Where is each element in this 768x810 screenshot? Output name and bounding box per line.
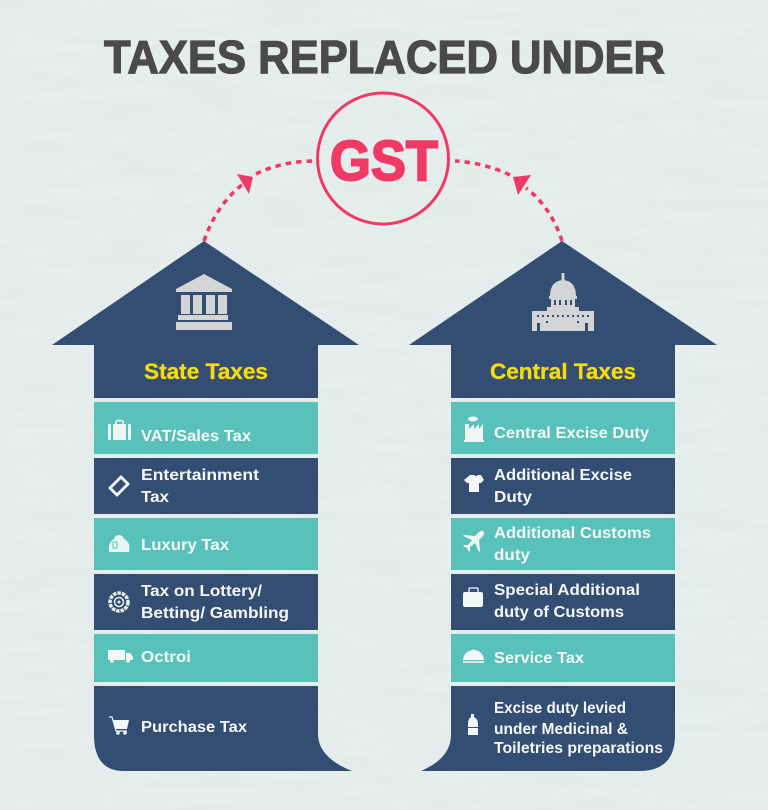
row: Luxury Tax — [94, 518, 318, 570]
row: Luxury Tax: Luxury Tax — [141, 537, 229, 554]
panel: state taxes — [52, 241, 359, 771]
GST circle badge — [318, 93, 448, 224]
state arrow head — [52, 241, 359, 398]
GST circle badge: GST — [330, 129, 438, 193]
row: Purchase Tax — [94, 686, 352, 771]
row: Additional Excise Duty: Additional Excise — [494, 467, 632, 484]
central arrow head — [409, 241, 717, 398]
row: Additional Customs duty: Additional Customs — [494, 525, 651, 542]
row: Excise duty levied under Medicinal & Toiletries preparations: under Medicinal & — [494, 721, 628, 738]
state heading: State Taxes — [144, 359, 268, 384]
row: Central Excise Duty: Central Excise Duty — [494, 425, 649, 442]
row: Entertainment Tax: Entertainment — [141, 467, 260, 484]
row: Entertainment Tax — [94, 458, 318, 514]
row: Tax on Lottery/Betting/Gambling: Betting/ Gambling — [141, 605, 289, 622]
row: Purchase Tax: Purchase Tax — [141, 719, 247, 736]
central heading: Central Taxes — [490, 359, 636, 384]
row: Tax on Lottery/Betting/Gambling: Tax on Lottery/ — [141, 583, 263, 600]
row: Excise duty levied under Medicinal & Toiletries preparations: Toiletries preparations — [494, 740, 663, 757]
arrow: GST to state taxes — [204, 161, 316, 241]
title: TAXES REPLACED UNDER — [104, 31, 665, 83]
panel: central taxes — [409, 241, 717, 771]
arrow: GST to central taxes — [455, 161, 562, 241]
icon: capitol — [532, 273, 594, 331]
row: Octroi — [94, 634, 318, 682]
row: Special Additional duty of Customs: duty of Customs — [494, 604, 624, 621]
row: Special Additional duty of Customs: Special Additional — [494, 582, 640, 599]
row: Excise duty levied under Medicinal & Toiletries preparations: Excise duty levied — [494, 700, 626, 717]
row: Additional Excise Duty — [451, 458, 675, 514]
row: Tax on Lottery/Betting/Gambling — [94, 574, 318, 630]
row: Special Additional duty of Customs — [451, 574, 675, 630]
row: Additional Excise Duty: Duty — [494, 489, 532, 506]
row: Central Excise Duty — [451, 402, 675, 454]
row: Additional Customs duty — [451, 518, 675, 570]
row: Service Tax: Service Tax — [494, 650, 584, 667]
row: VAT/Sales Tax — [94, 402, 318, 454]
row: VAT/Sales Tax: VAT/Sales Tax — [141, 428, 251, 445]
row: Excise duty levied under Medicinal & Toiletries preparations — [421, 686, 675, 771]
icon: bank — [176, 274, 232, 330]
row: Service Tax — [451, 634, 675, 682]
row: Entertainment Tax: Tax — [141, 489, 169, 506]
row: Octroi: Octroi — [141, 649, 191, 666]
row: Additional Customs duty: duty — [494, 547, 530, 564]
